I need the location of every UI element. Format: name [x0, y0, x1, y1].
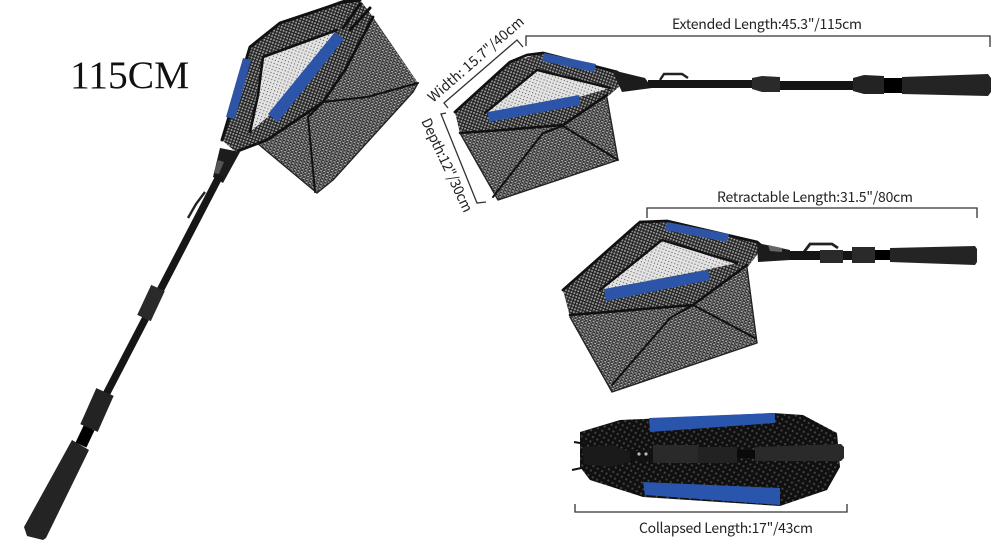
- lower tube: [780, 81, 854, 90]
- folded handle: [572, 442, 844, 470]
- dimension: width bracket: [444, 40, 523, 108]
- head joint: [213, 148, 240, 183]
- upper sleeve: [144, 288, 158, 318]
- black section: [884, 78, 902, 93]
- product: extended net, horizontal: [455, 53, 991, 200]
- title: 115CM: 115CM: [70, 53, 189, 97]
- dimension: collapsed label: Collapsed Length:17"/43cm: [639, 518, 813, 538]
- lower sleeve: [853, 75, 884, 94]
- handle: [757, 243, 977, 265]
- handle: [24, 148, 240, 540]
- blue float, top: [542, 53, 596, 72]
- head joint: [757, 243, 790, 262]
- frame and seams: [222, 0, 418, 193]
- dimension: width label: Width: 15.7"/40cm: [423, 12, 528, 107]
- frame and seams: [455, 53, 627, 200]
- frame and seams: [563, 221, 763, 392]
- pole tube: [85, 175, 220, 435]
- grip: [890, 246, 977, 265]
- dimension: extended label: Extended Length:45.3"/115cm: [672, 14, 862, 34]
- upper net, darker: [455, 53, 627, 133]
- upper net, darker: [563, 221, 763, 315]
- dimension: depth bracket: [441, 113, 486, 203]
- black section: [81, 428, 89, 445]
- black section: [875, 250, 890, 260]
- frame opening: [600, 240, 737, 290]
- dimension: collapsed bracket: [575, 504, 847, 512]
- sleeve, upper: [653, 445, 698, 463]
- lower sleeve: [89, 392, 105, 428]
- head: [582, 445, 630, 467]
- upper sleeve: [820, 250, 843, 263]
- dimension: depth label: Depth:12"/30cm: [416, 115, 478, 216]
- lock clip: [660, 74, 688, 80]
- grip: [24, 440, 89, 540]
- net bag: [563, 221, 763, 392]
- blue float, top: [665, 222, 729, 242]
- lock clip: [804, 244, 838, 252]
- upper tube: [648, 80, 754, 88]
- dimension: retractable label: Retractable Length:31.5"/80cm: [717, 187, 913, 207]
- grip: [755, 444, 844, 461]
- sleeve, lower: [698, 447, 737, 463]
- blue float, centre: [268, 32, 344, 122]
- net bag: [222, 0, 418, 193]
- blue float, bottom: [643, 482, 780, 505]
- product: diagonal landing net, extended: [24, 0, 418, 540]
- lower sleeve: [852, 247, 875, 263]
- net bag: [580, 413, 840, 506]
- dimension: extended bracket: [526, 36, 990, 47]
- rivets: [637, 452, 641, 456]
- blue float, centre: [604, 270, 710, 301]
- handle: [612, 70, 991, 96]
- tube: [737, 450, 757, 458]
- upper tube: [790, 251, 822, 260]
- joint: [630, 451, 654, 461]
- blue float, centre: [488, 95, 580, 122]
- lock clip: [188, 192, 205, 218]
- blue float, left: [226, 58, 251, 119]
- grip: [902, 74, 991, 96]
- head joint: [612, 70, 652, 92]
- product: retracted net: [563, 221, 977, 392]
- upper net, darker: [222, 0, 373, 153]
- lower tube: [843, 251, 853, 260]
- net bag: [455, 53, 627, 200]
- dimension: retractable bracket: [647, 208, 977, 218]
- blue float, top: [649, 413, 775, 432]
- product: collapsed net: [572, 413, 844, 506]
- upper sleeve: [752, 76, 780, 92]
- frame opening: [250, 30, 337, 132]
- frame opening: [485, 70, 610, 113]
